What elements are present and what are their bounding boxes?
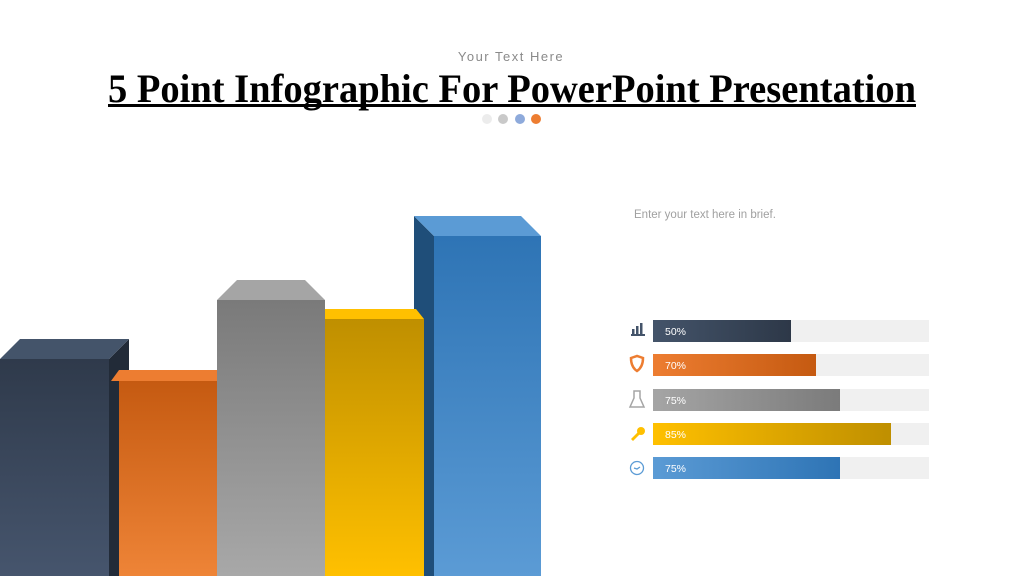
row 75% gray: 75% bbox=[665, 395, 686, 407]
row 50%: 50% bbox=[665, 326, 686, 338]
icon: clock bbox=[630, 462, 644, 474]
bar: navy bbox=[0, 339, 129, 576]
icon: key bbox=[631, 427, 645, 441]
row 70% bbox=[631, 354, 929, 376]
text block: Enter your text here in brief. bbox=[634, 209, 776, 221]
3D bar chart bbox=[0, 216, 541, 576]
icon: shield bbox=[631, 356, 643, 371]
icon: flask bbox=[630, 391, 644, 407]
row 70%: 70% bbox=[665, 360, 686, 372]
progress bars bbox=[630, 320, 929, 479]
subtitle: Your Text Here bbox=[458, 49, 564, 64]
bar: blue bbox=[414, 216, 541, 576]
dots bbox=[482, 114, 541, 124]
row 75% gray bbox=[630, 389, 929, 411]
row 75% blue: 75% bbox=[665, 463, 686, 475]
bar: gray bbox=[217, 280, 325, 576]
row 85% bbox=[631, 423, 929, 445]
icon: chart bbox=[631, 323, 645, 336]
bar: yellow bbox=[325, 309, 424, 576]
row 75% blue bbox=[630, 457, 929, 479]
title: 5 Point Infographic For PowerPoint Presentation bbox=[108, 66, 916, 111]
row 85%: 85% bbox=[665, 429, 686, 441]
bar: orange bbox=[111, 370, 217, 576]
row 50% bbox=[631, 320, 929, 342]
